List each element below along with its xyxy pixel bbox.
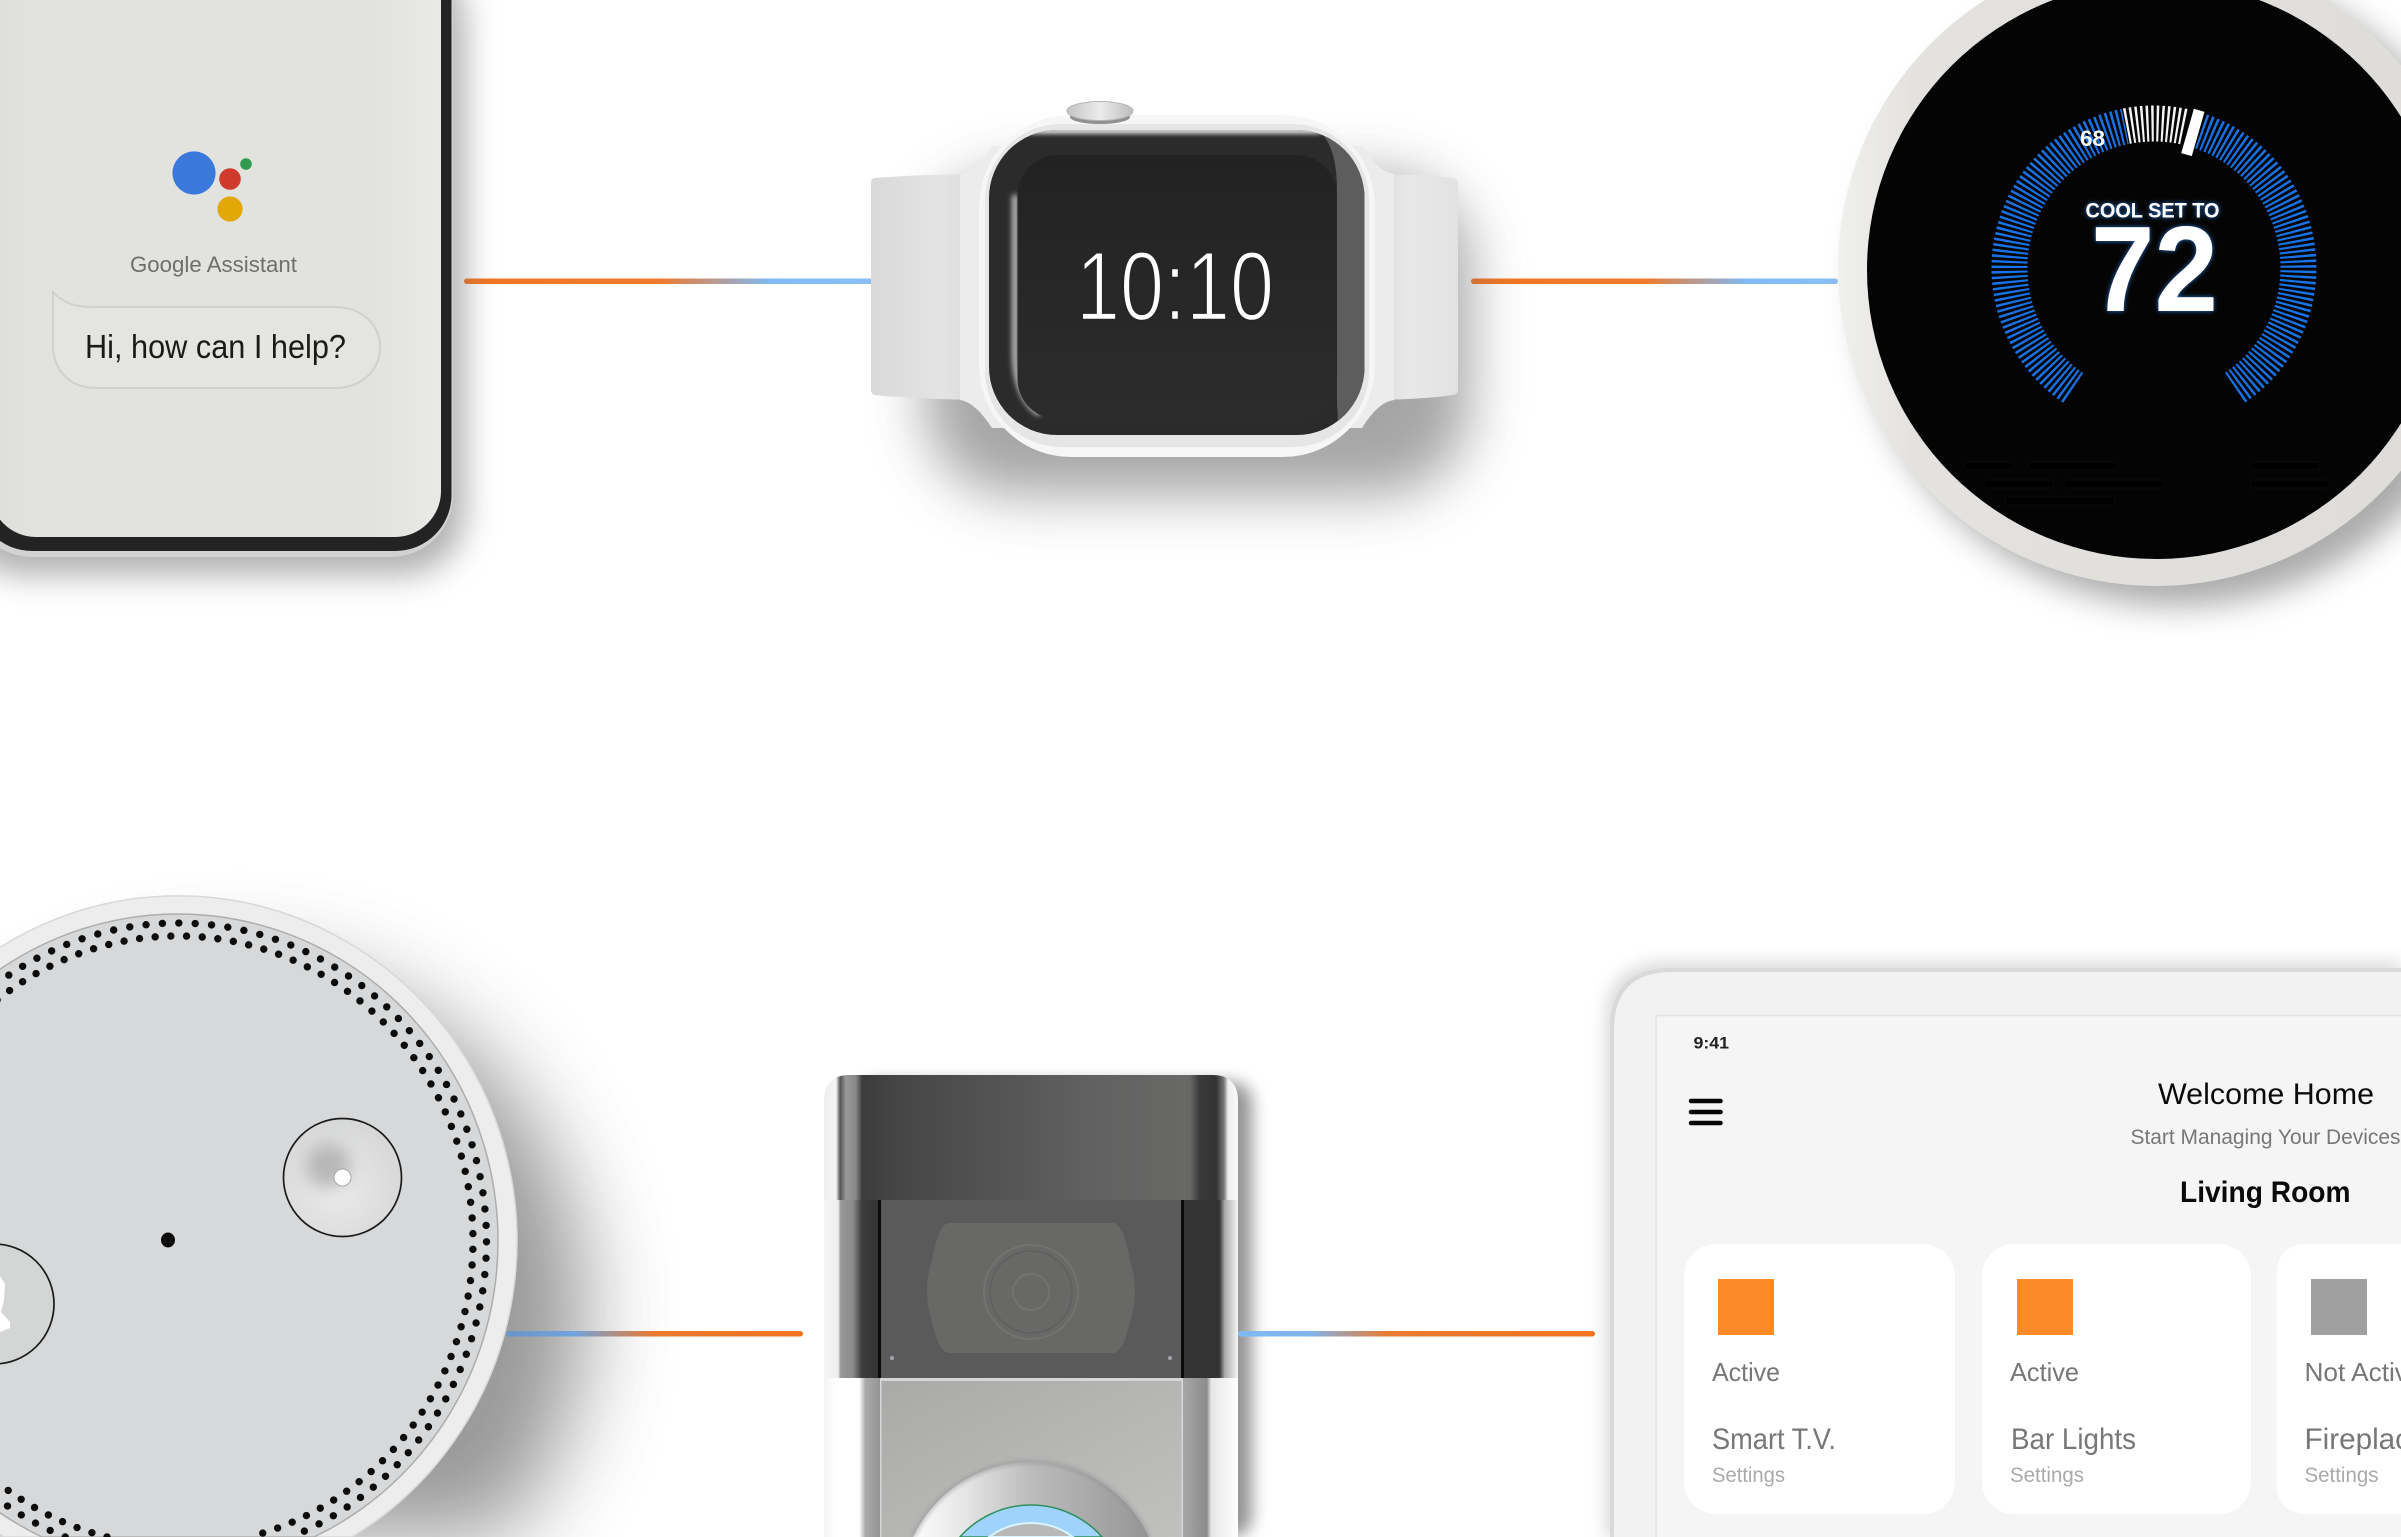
faceplate edge lines xyxy=(880,1378,1183,1537)
phone shadow xyxy=(0,0,465,575)
watch crown xyxy=(1067,102,1133,124)
speaker top xyxy=(0,914,498,1537)
right bevel xyxy=(1323,135,1364,421)
label: Google Assistant: Google Assistant xyxy=(130,252,297,277)
tablet screen xyxy=(1656,1016,2401,1537)
watch case xyxy=(979,115,1375,457)
left bevel highlight xyxy=(1015,195,1040,414)
connector line: speaker to doorbell xyxy=(506,1331,803,1336)
tablet shadow xyxy=(1605,962,2401,1537)
thermostat ring xyxy=(1838,0,2401,586)
speaker shadow xyxy=(0,965,585,1537)
device: smart watch xyxy=(871,102,1470,495)
card: Smart T.V.: Settings xyxy=(1712,1464,1785,1487)
speech bubble: Hi, how can I help? xyxy=(85,328,346,365)
mode label: COOL SET TO xyxy=(2086,200,2220,222)
doorbell button xyxy=(913,1462,1149,1537)
icon: menu xyxy=(1691,1101,1720,1123)
heading: Living Room: Living Room xyxy=(2180,1176,2350,1209)
gauge set marker xyxy=(2186,110,2199,155)
watch time: 10:10 xyxy=(1076,231,1274,341)
sensor dots xyxy=(890,1356,1172,1360)
subheading: Start Managing Your Devices xyxy=(2130,1126,2400,1149)
camera panel edges xyxy=(878,1200,1184,1378)
thermostat face xyxy=(1867,0,2401,559)
watch display xyxy=(1018,155,1336,419)
connector line: phone to watch xyxy=(464,278,874,284)
card: Fireplace: Settings xyxy=(2304,1464,2378,1487)
heading: Welcome Home: Welcome Home xyxy=(2158,1078,2374,1111)
status bar time: 9:41 xyxy=(1694,1034,1729,1052)
card: Bar Lights: Bar Lights xyxy=(2011,1423,2136,1456)
speaker holes xyxy=(0,923,487,1537)
device: thermostat xyxy=(1838,0,2401,606)
icon: Google Assistant dots xyxy=(172,151,252,222)
phone frame xyxy=(0,0,453,557)
device: tablet app xyxy=(1605,962,2401,1537)
action button xyxy=(284,1118,402,1236)
speech bubble xyxy=(53,292,380,388)
device: video doorbell xyxy=(824,1075,1595,1537)
microphone hole xyxy=(161,1232,175,1248)
card: Smart T.V. xyxy=(1684,1244,1955,1514)
gauge ticks xyxy=(2009,124,2298,388)
device: smart speaker xyxy=(0,896,803,1537)
speaker rim xyxy=(0,896,517,1537)
card: Bar Lights: Settings xyxy=(2010,1464,2084,1487)
card: Smart T.V.: Smart T.V. xyxy=(1712,1423,1836,1456)
doorbell middle band xyxy=(824,1200,1238,1378)
tablet bezel edge xyxy=(1612,970,2401,1537)
watch glass xyxy=(985,124,1369,447)
thermostat shadow xyxy=(1860,0,2401,606)
watch lugs xyxy=(960,146,1394,428)
phone screen xyxy=(0,0,441,537)
set temperature: 72 xyxy=(2091,201,2218,337)
camera lens plate xyxy=(927,1223,1135,1353)
card: Smart T.V.: Active xyxy=(1712,1357,1780,1387)
watch shadow xyxy=(925,175,1470,495)
thermostat vents xyxy=(1964,462,2330,505)
card: Fireplace xyxy=(2276,1244,2401,1514)
tablet bezel xyxy=(1612,970,2401,1537)
doorbell faceplate xyxy=(881,1378,1182,1537)
tablet screen edge xyxy=(1656,1016,2401,1537)
camera lens xyxy=(984,1245,1078,1339)
camera panel xyxy=(880,1200,1182,1378)
top bevel highlight xyxy=(1030,127,1320,134)
watch strap left xyxy=(871,174,1000,400)
mute button xyxy=(0,1244,54,1364)
connector line: watch to thermostat xyxy=(1471,278,1838,284)
current temperature: 68 xyxy=(2080,126,2105,151)
device: phone with Google Assistant xyxy=(0,0,465,575)
watch strap right xyxy=(1360,174,1458,400)
card: Bar Lights: Active xyxy=(2010,1357,2079,1387)
phone black bezel xyxy=(0,0,452,551)
doorbell lower shell xyxy=(824,1378,1238,1537)
card: Bar Lights xyxy=(1982,1244,2251,1514)
doorbell shadow xyxy=(860,1082,1252,1537)
watch screen xyxy=(989,127,1370,435)
connector line: doorbell to tablet xyxy=(1238,1331,1595,1336)
doorbell body xyxy=(824,1075,1238,1537)
doorbell top cap xyxy=(824,1075,1238,1200)
